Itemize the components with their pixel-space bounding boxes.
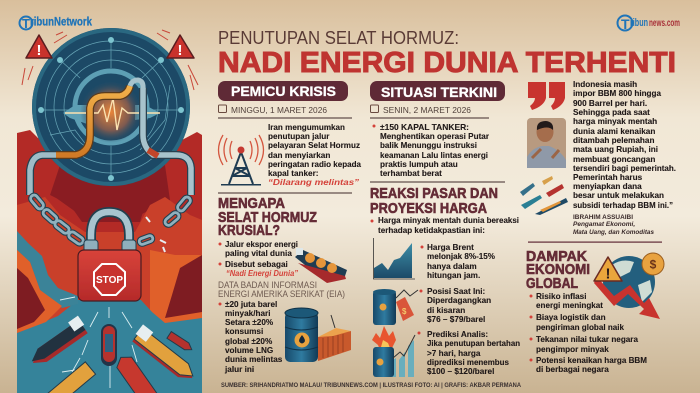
panel: quote: Mata Uang, dan Komoditas bbox=[573, 229, 654, 236]
panel: reaksi pasar dan proyeksi harga: diprediksi menembus bbox=[427, 358, 509, 367]
padlock with stop sign bbox=[78, 212, 141, 301]
panel: quote: impor BBM 800 hingga bbox=[573, 89, 661, 98]
panel: dampak ekonomi global: Risiko inflasi bbox=[536, 292, 587, 301]
panel: reaksi pasar dan proyeksi harga: PROYEKSI HARGA bbox=[370, 201, 487, 217]
panel: quote: tersendiri bagi pemerintah. bbox=[573, 164, 676, 173]
panel: mengapa selat hormuz krusial bbox=[218, 196, 351, 374]
text: iran announcement: “Dilarang melintas” bbox=[268, 177, 360, 187]
text: iran announcement: pelayaran Selat Hormuz bbox=[268, 141, 360, 150]
panel: mengapa selat hormuz krusial: dunia melintas bbox=[225, 355, 283, 364]
panel: situasi terkini: keamanan Lalu lintas energi bbox=[380, 151, 488, 160]
logo: Tribun Network bbox=[20, 14, 92, 31]
icon: globe with falling arrow and coin bbox=[594, 253, 664, 319]
panel: dampak ekonomi global: Biaya logistik dan bbox=[536, 313, 606, 322]
panel: mengapa selat hormuz krusial: MENGAPA bbox=[218, 196, 285, 212]
icon: burning barrel with arrow bbox=[372, 326, 415, 377]
panel: quote: membuat goncangan bbox=[573, 155, 655, 164]
panel: pemicu krisis: PEMICU KRISIS bbox=[231, 84, 336, 99]
icon: oil barrel bbox=[285, 308, 318, 362]
panel: reaksi pasar dan proyeksi harga: $100 – $120/barel bbox=[427, 367, 494, 376]
panel: pemicu krisis: MINGGU, 1 MARET 2026 bbox=[231, 105, 327, 115]
title: NADI ENERGI DUNIA TERHENTI bbox=[218, 47, 676, 79]
text: iran announcement: kapal tanker: bbox=[268, 169, 319, 178]
logo: tribunnews bbox=[618, 16, 680, 32]
panel: quote: Pengamat Ekonomi, bbox=[573, 221, 635, 228]
panel: situasi terkini: terhambat berat bbox=[380, 169, 442, 178]
panel: mengapa selat hormuz krusial: ENERGI AMERIKA SERIKAT (EIA) bbox=[218, 289, 345, 299]
panel: mengapa selat hormuz krusial: SELAT HORMUZ bbox=[218, 210, 317, 226]
panel: quote: Sehingga pada saat bbox=[573, 108, 650, 117]
panel: dampak ekonomi global: pengimpor minyak bbox=[536, 345, 609, 354]
panel: dampak ekonomi global: di berbagai negara bbox=[536, 365, 609, 374]
panel: mengapa selat hormuz krusial: DATA BADAN INFORMASI bbox=[218, 280, 317, 290]
panel: reaksi pasar dan proyeksi harga: Jika penutupan bertahan bbox=[427, 339, 520, 348]
panel: reaksi pasar dan proyeksi harga: Harga minyak mentah dunia bereaksi bbox=[378, 216, 519, 225]
text: iran announcement: Iran mengumumkan bbox=[268, 123, 345, 132]
panel: reaksi pasar dan proyeksi harga: Diperdagangkan bbox=[427, 296, 491, 305]
panel: mengapa selat hormuz krusial: jalur ini bbox=[224, 365, 254, 374]
title: PENUTUPAN SELAT HORMUZ: bbox=[218, 28, 459, 48]
warning triangle right: ! bbox=[178, 42, 182, 59]
icon: lng ship bbox=[295, 248, 347, 283]
panel: mengapa selat hormuz krusial: Setara ±20% bbox=[225, 318, 274, 327]
panel: mengapa selat hormuz krusial: Jalur ekspor energi bbox=[225, 240, 298, 249]
title bbox=[218, 28, 676, 79]
panel: quote: besar untuk melakukan bbox=[573, 191, 664, 200]
panel: quote: ditambah pelemahan bbox=[573, 136, 654, 145]
panel: mengapa selat hormuz krusial: ±20 juta barel bbox=[225, 300, 277, 309]
illustration: blocked Strait of Hormuz bbox=[17, 28, 202, 393]
panel: reaksi pasar dan proyeksi harga: melonjak 8%-15% bbox=[427, 252, 496, 261]
logo: tribunnews: ribun bbox=[630, 17, 648, 29]
text: iran announcement: peringatan radio kepada bbox=[268, 160, 361, 169]
text: iran announcement: dan menyiarkan bbox=[268, 151, 330, 160]
panel: reaksi pasar dan proyeksi harga: terhadap ketidakpastian ini: bbox=[378, 226, 485, 235]
panel: situasi terkini: praktis lumpuh atau bbox=[380, 160, 458, 169]
panel: reaksi pasar dan proyeksi harga: Posisi Saat Ini: bbox=[427, 287, 485, 296]
panel: reaksi pasar dan proyeksi harga: hanya dalam bbox=[427, 262, 477, 271]
panel: situasi terkini: balik Menunggu instruksi bbox=[380, 141, 477, 150]
panel: mengapa selat hormuz krusial: KRUSIAL? bbox=[218, 223, 280, 239]
panel: reaksi pasar dan proyeksi harga: Prediksi Analis: bbox=[427, 330, 488, 339]
panel: mengapa selat hormuz krusial: konsumsi bbox=[225, 327, 263, 336]
photo: ibrahim assuaibi bbox=[527, 118, 566, 168]
panel: quote: IBRAHIM ASSUAIBI bbox=[573, 214, 633, 221]
icon: radio tower bbox=[218, 135, 264, 186]
panel: dampak ekonomi global: pengiriman global naik bbox=[536, 323, 624, 332]
panel: reaksi pasar dan proyeksi harga: $76 – $79/barel bbox=[427, 315, 485, 324]
panel: dampak ekonomi global: DAMPAK bbox=[526, 249, 588, 265]
panel: mengapa selat hormuz krusial: volume LNG bbox=[225, 346, 273, 355]
panel: dampak ekonomi global bbox=[526, 249, 664, 374]
panel: mengapa selat hormuz krusial: paling vital dunia bbox=[225, 249, 292, 258]
text: iran announcement: penutupan jalur bbox=[268, 132, 330, 141]
logo: tribunnews: T bbox=[621, 16, 630, 32]
panel: dampak ekonomi global: Tekanan nilai tukar negara bbox=[536, 335, 638, 344]
panel: mengapa selat hormuz krusial: “Nadi Energi Dunia” bbox=[226, 269, 298, 278]
padlock with stop sign: STOP bbox=[96, 275, 123, 286]
panel: dampak ekonomi global: energi meningkat bbox=[536, 301, 603, 310]
chain right bbox=[138, 196, 192, 252]
panel: situasi terkini: ±150 KAPAL TANKER: bbox=[380, 123, 469, 132]
icon: small tanker ships bbox=[520, 176, 568, 215]
logo: Tribun Network: T bbox=[22, 16, 30, 31]
tanker ships bbox=[25, 316, 200, 393]
panel: reaksi pasar dan proyeksi harga: REAKSI PASAR DAN bbox=[370, 186, 498, 202]
globe radar with pipeline bbox=[30, 28, 191, 195]
icon: barrel with price tag bbox=[373, 289, 418, 325]
warning triangle right bbox=[167, 35, 194, 59]
icon: container bbox=[318, 315, 351, 361]
panel: quote: menyiapkan dana bbox=[573, 182, 642, 191]
icon: globe with falling arrow and coin: $ bbox=[650, 258, 657, 272]
footer credits: SUMBER: SRIHANDRIATMO MALAU/ TRIBUNNEWS.COM | ILUSTRASI FOTO: AI | GRAFIS: AKBAR PERMANA bbox=[221, 383, 522, 389]
panel: reaksi pasar dan proyeksi harga bbox=[370, 186, 520, 377]
panel: pemicu krisis bbox=[218, 81, 361, 194]
panel: dampak ekonomi global: GLOBAL bbox=[526, 276, 578, 292]
panel: mengapa selat hormuz krusial: Disebut sebagai bbox=[225, 260, 288, 269]
icon: quotation marks bbox=[528, 82, 565, 110]
icon: barrel with price tag: $ bbox=[402, 307, 407, 316]
panel: reaksi pasar dan proyeksi harga: Harga Brent bbox=[427, 243, 474, 252]
panel: quote: Indonesia masih bbox=[573, 80, 637, 89]
chain left bbox=[29, 194, 85, 245]
logo: tribunnews: news.com bbox=[649, 18, 680, 29]
sea bbox=[17, 300, 202, 393]
panel: quote bbox=[520, 80, 676, 236]
chart: rising price bbox=[374, 238, 415, 279]
text: iran announcement bbox=[268, 123, 361, 187]
panel: situasi terkini: Menghentikan operasi Putar bbox=[380, 132, 490, 141]
panel: reaksi pasar dan proyeksi harga: hitungan jam. bbox=[427, 271, 480, 280]
alert arrows bbox=[22, 30, 198, 90]
panel: dampak ekonomi global: Potensi kenaikan harga BBM bbox=[536, 356, 647, 365]
panel: dampak ekonomi global: EKONOMI bbox=[526, 262, 590, 278]
panel: quote: dunia alami kenaikan bbox=[573, 127, 655, 136]
logo: Tribun Network: ribunNetwork bbox=[30, 14, 92, 28]
panel: situasi terkini bbox=[370, 81, 505, 182]
panel: situasi terkini: SENIN, 2 MARET 2026 bbox=[383, 105, 471, 115]
panel: reaksi pasar dan proyeksi harga: di kisaran bbox=[427, 306, 465, 315]
panel: mengapa selat hormuz krusial: global ±20% bbox=[225, 337, 273, 346]
warning triangle left bbox=[26, 35, 52, 59]
panel: situasi terkini: SITUASI TERKINI bbox=[381, 85, 497, 100]
warning triangle left: ! bbox=[36, 42, 42, 59]
panel: quote: 900 Barrel per hari. bbox=[573, 99, 647, 108]
panel: quote: Pemerintah harus bbox=[573, 173, 643, 182]
panel: reaksi pasar dan proyeksi harga: >7 hari, harga bbox=[427, 349, 481, 358]
icon: globe with falling arrow and coin: ! bbox=[606, 266, 610, 282]
panel: mengapa selat hormuz krusial: minyak/hari bbox=[225, 309, 271, 318]
panel: quote: subsidi terhadap BBM ini.” bbox=[573, 201, 673, 210]
panel: quote: mata uang Rupiah, ini bbox=[573, 145, 658, 154]
panel: quote: harga minyak mentah bbox=[573, 117, 657, 126]
